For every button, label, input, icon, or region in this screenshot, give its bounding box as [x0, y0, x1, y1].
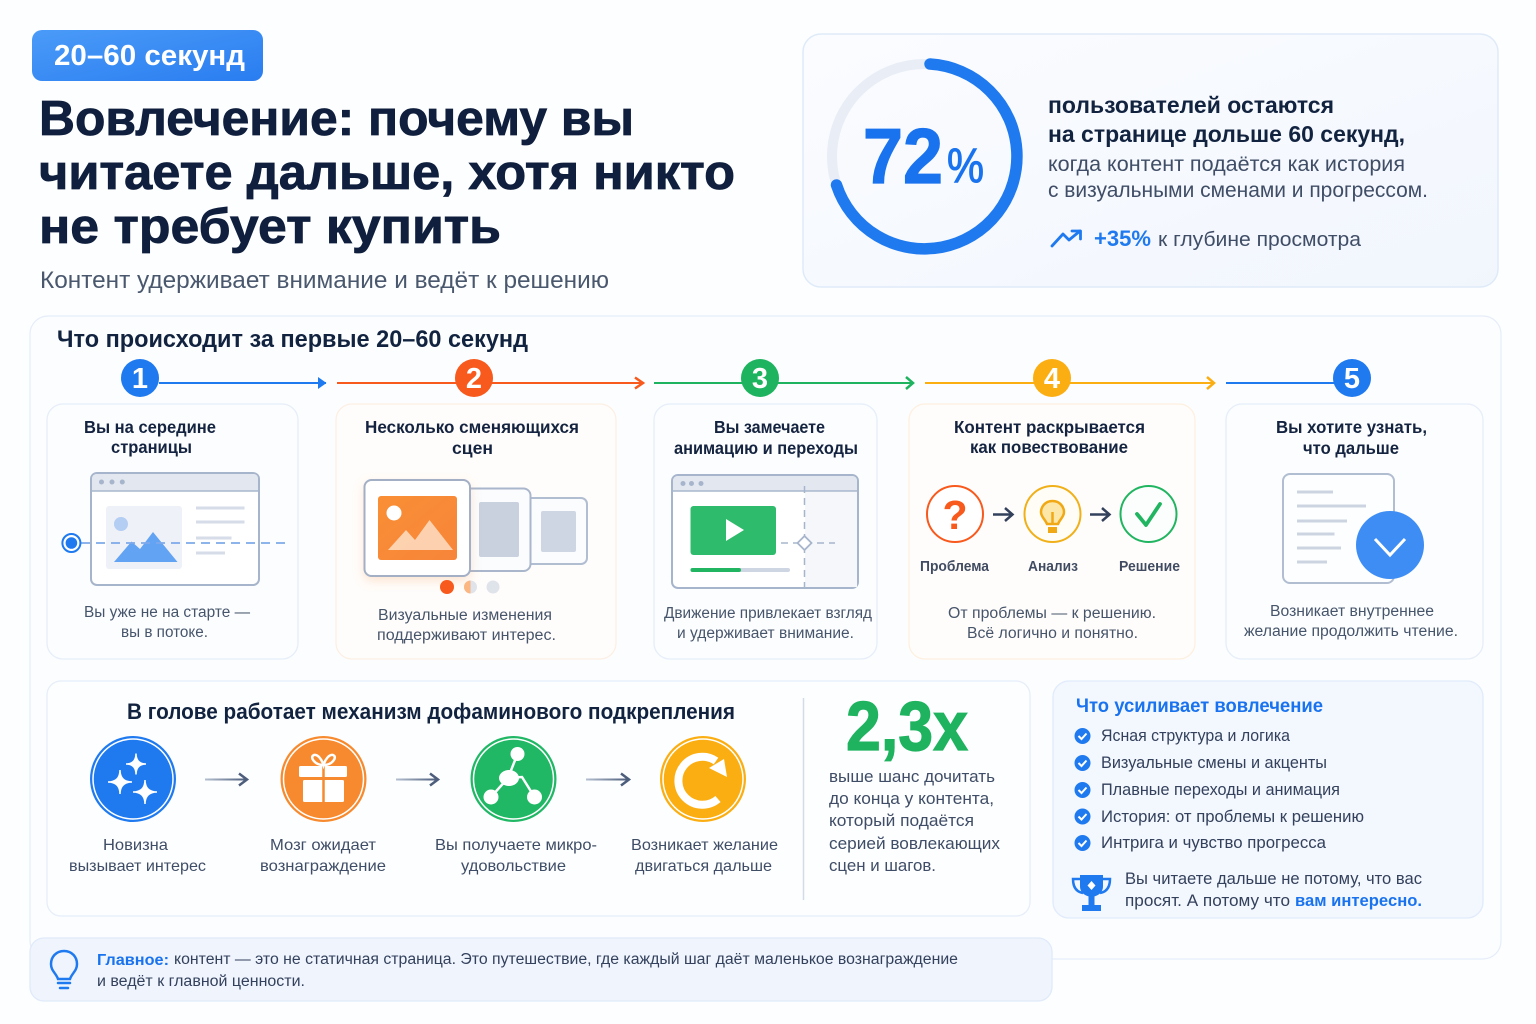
- label: micro-pleasure: удовольствие: [461, 858, 566, 875]
- card 2 title: Несколько сменяющихся: [365, 417, 579, 437]
- labels: problem, analysis, solution: Анализ: [1028, 559, 1078, 575]
- text: statistic description: когда контент подаётся как история: [1048, 152, 1405, 176]
- panel: first 20–60 seconds: [30, 316, 1501, 959]
- panel: dopamine mechanism: [47, 681, 1030, 916]
- label: desire to continue: двигаться дальше: [635, 858, 772, 875]
- label: novelty: [69, 837, 206, 875]
- text: 2,3x explanation: сцен и шагов.: [829, 856, 936, 875]
- step 3 marker and arrow: 3: [752, 363, 768, 395]
- card 5 title: что дальше: [1303, 438, 1399, 458]
- step 2 marker and arrow: 2: [466, 363, 482, 395]
- card 3 title: Вы замечаете: [714, 417, 825, 437]
- card 3 title: [674, 417, 858, 458]
- step 1 marker and arrow: 1: [132, 363, 148, 395]
- icon: scene cards: [364, 480, 587, 594]
- card 3: animation and transitions: [654, 404, 877, 659]
- arrow: problem to analysis: [993, 508, 1012, 521]
- step 1 marker and arrow: [121, 359, 326, 397]
- title: читаете дальше, хотя никто: [39, 146, 735, 200]
- text: 2,3x explanation: серией вовлекающих: [829, 834, 1001, 853]
- icon: trophy: [1073, 875, 1110, 911]
- icon: document with scroll-down button: [1283, 474, 1424, 583]
- title: [39, 92, 735, 254]
- step 5 marker: [1226, 359, 1371, 397]
- card 3 description: и удерживает внимание.: [677, 625, 854, 642]
- panel: 72% statistic: [803, 34, 1498, 287]
- label: expectation: Мозг ожидает: [270, 837, 377, 854]
- card 1 description: вы в потоке.: [121, 624, 208, 641]
- card 5 description: Возникает внутреннее: [1270, 603, 1434, 620]
- icon: browser window with scroll position: [62, 473, 286, 585]
- label: novelty: вызывает интерес: [69, 858, 206, 875]
- checklist: Визуальные смены и акценты: [1101, 754, 1327, 772]
- text: statistic description: пользователей остаются: [1048, 92, 1334, 118]
- card 1 title: [84, 417, 216, 457]
- card 1 description: [84, 604, 250, 641]
- title: не требует купить: [39, 200, 501, 254]
- icon: momentum refresh: [660, 736, 746, 822]
- card 1: middle of the page: [47, 404, 298, 659]
- card 2 description: поддерживают интерес.: [377, 627, 556, 644]
- arrow: [205, 774, 247, 786]
- card 5 description: желание продолжить чтение.: [1244, 623, 1458, 640]
- icon: problem question mark: [927, 486, 983, 542]
- card 4: storytelling: [909, 404, 1195, 659]
- checklist: [1074, 727, 1364, 852]
- labels: problem, analysis, solution: Решение: [1119, 559, 1180, 575]
- card 5 title: Вы хотите узнать,: [1276, 417, 1427, 437]
- step 4 marker and arrow: 4: [1044, 363, 1060, 395]
- text: +35% к глубине просмотра: к глубине просмотра: [1158, 228, 1362, 251]
- badge: 20–60 секунд: 20–60 секунд: [54, 40, 245, 72]
- label: micro-pleasure: Вы получаете микро-: [435, 837, 597, 854]
- step 5 marker: 5: [1344, 363, 1360, 395]
- card 4 title: [954, 417, 1145, 457]
- text: +35% к глубине просмотра: +35%: [1094, 226, 1151, 251]
- text: closing note: [1125, 870, 1422, 910]
- icon: trend arrow: [1052, 231, 1080, 246]
- number: 2,3x: 2,3x: [846, 687, 968, 765]
- title: Вовлечение: почему вы: [39, 92, 634, 146]
- labels: problem, analysis, solution: Проблема: [920, 559, 990, 575]
- subtitle: Контент удерживает внимание и ведёт к решению: [40, 267, 609, 294]
- text: 2,3x explanation: до конца у контента,: [829, 789, 994, 808]
- card 5: what comes next: [1226, 404, 1483, 659]
- icon: light bulb: [51, 951, 77, 988]
- icon: video window: [672, 475, 858, 590]
- badge: 20–60 секунд: [32, 30, 263, 81]
- text: closing note: Вы читаете дальше не потому, что вас: [1125, 870, 1422, 888]
- label: expectation: вознаграждение: [260, 858, 386, 875]
- label: desire to continue: Возникает желание: [631, 837, 778, 854]
- icon: reward gift: [280, 736, 366, 822]
- labels: problem, analysis, solution: [920, 559, 1180, 575]
- card 5 description: [1244, 603, 1458, 640]
- icon: solution check mark: [1120, 486, 1176, 542]
- icon: analysis light bulb: [1024, 486, 1080, 542]
- card 2: changing scenes: [336, 404, 616, 659]
- checklist: Плавные переходы и анимация: [1101, 781, 1340, 799]
- step 2 marker and arrow: [337, 359, 643, 397]
- text: 2,3x explanation: выше шанс дочитать: [829, 767, 995, 786]
- heading: dopamine: В голове работает механизм дофаминового подкрепления: [127, 699, 735, 724]
- text: takeaway: [97, 951, 958, 990]
- card 2 description: Визуальные изменения: [378, 607, 552, 624]
- checklist: Ясная структура и логика: [1101, 727, 1291, 745]
- number: 72%: %: [947, 140, 984, 193]
- card 1 title: страницы: [111, 437, 192, 457]
- card 1 title: Вы на середине: [84, 417, 216, 437]
- arrow: [396, 774, 438, 786]
- text: closing note: просят. А потому что: [1125, 892, 1290, 910]
- label: micro-pleasure: [435, 837, 597, 875]
- card 2 title: [365, 417, 579, 458]
- card 1 description: Вы уже не на старте —: [84, 604, 250, 621]
- card 2 description: [377, 607, 556, 644]
- step 3 marker and arrow: [654, 359, 913, 397]
- text: takeaway: и ведёт к главной ценности.: [97, 973, 305, 990]
- label: desire to continue: [631, 837, 778, 875]
- callout: main takeaway: [30, 938, 1052, 1001]
- checklist: Интрига и чувство прогресса: [1101, 834, 1327, 852]
- text: statistic description: на странице дольше 60 секунд,: [1048, 121, 1405, 147]
- label: novelty: Новизна: [103, 837, 168, 854]
- chart: 72% progress ring: [832, 64, 1017, 249]
- label: expectation: [260, 837, 386, 875]
- text: 2,3x explanation: [829, 767, 1001, 875]
- arrow: [586, 774, 629, 786]
- text: +35% к глубине просмотра: [1094, 226, 1362, 251]
- card 4 description: [948, 605, 1156, 642]
- checklist: История: от проблемы к решению: [1101, 808, 1364, 826]
- card 3 title: анимацию и переходы: [674, 438, 858, 458]
- number: 72%: 72: [863, 112, 943, 200]
- heading: boosts: Что усиливает вовлечение: [1076, 695, 1323, 717]
- card 5 title: [1276, 417, 1427, 458]
- icon: pleasure molecule: [470, 736, 556, 822]
- text: statistic description: с визуальными сменами и прогрессом.: [1048, 178, 1428, 202]
- card 3 description: Движение привлекает взгляд: [664, 605, 872, 622]
- card 4 title: Контент раскрывается: [954, 417, 1145, 437]
- card 4 description: От проблемы — к решению.: [948, 605, 1156, 622]
- heading: first seconds: Что происходит за первые 20–60 секунд: [57, 326, 528, 353]
- icon: problem question mark: ?: [942, 492, 968, 538]
- step 4 marker and arrow: [925, 359, 1214, 397]
- arrow: analysis to solution: [1090, 508, 1110, 521]
- text: 2,3x explanation: который подаётся: [829, 811, 974, 830]
- card 4 description: Всё логично и понятно.: [967, 625, 1138, 642]
- card 2 title: сцен: [452, 438, 493, 458]
- text: takeaway: Главное:: [97, 952, 169, 969]
- card 3 description: [664, 605, 872, 642]
- text: takeaway: контент — это не статичная страница. Это путешествие, где каждый шаг даёт маленькое вознаграждение: [174, 951, 958, 968]
- text: statistic description: [1048, 92, 1428, 202]
- icon: novelty sparkles: [90, 736, 176, 822]
- card 4 title: как повествование: [970, 437, 1128, 457]
- panel: what boosts engagement: [1053, 681, 1483, 918]
- text: closing note: вам интересно.: [1295, 892, 1422, 910]
